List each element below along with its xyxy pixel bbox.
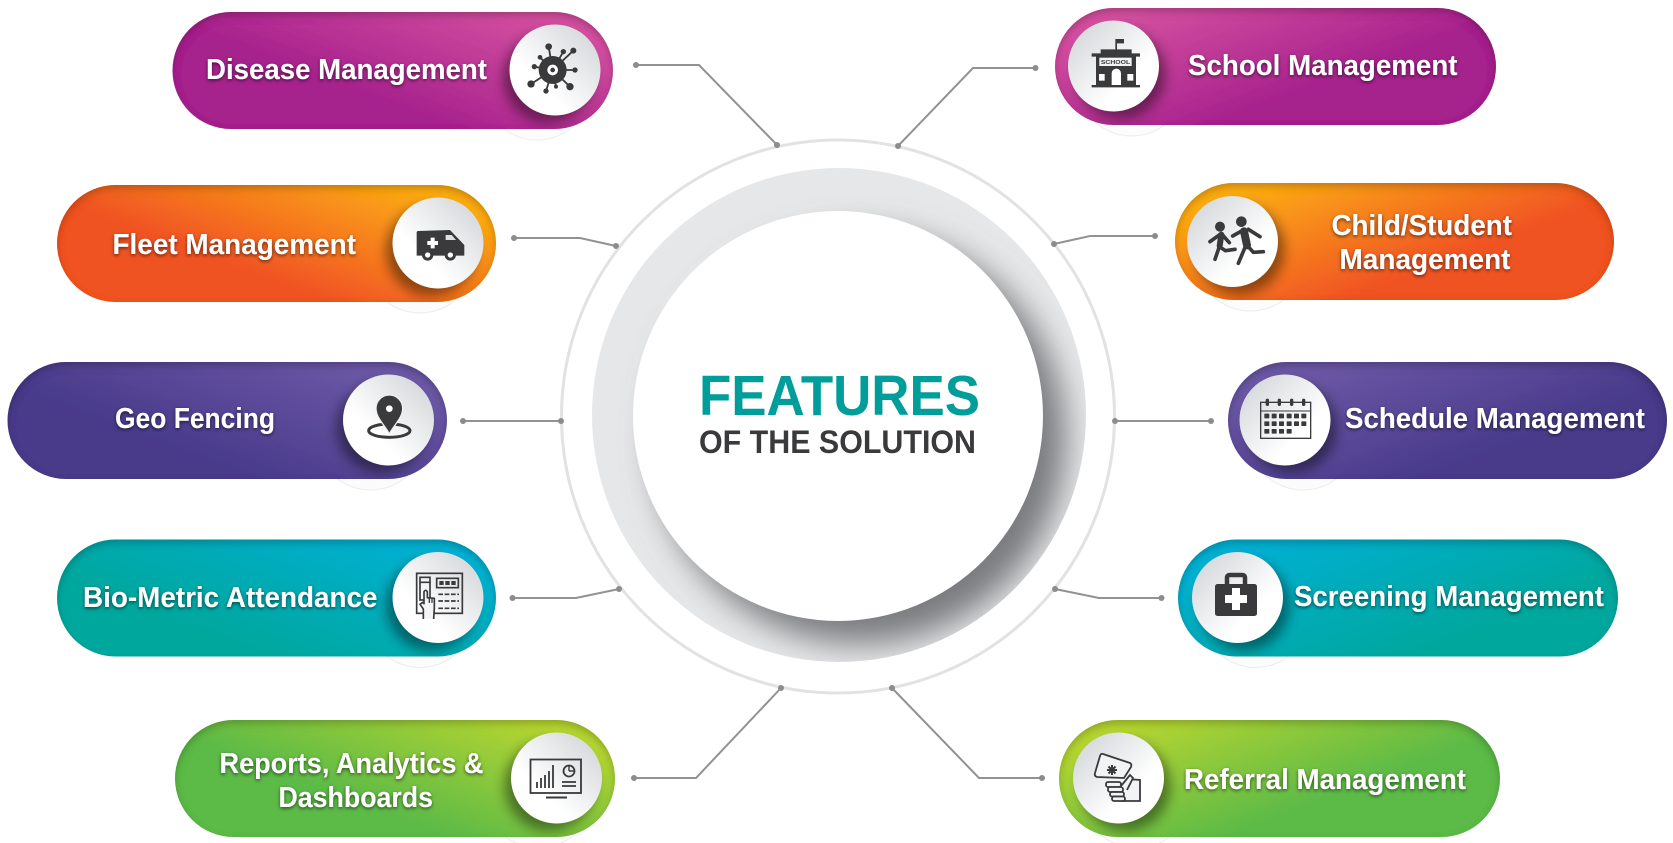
label: Bio-Metric Attendance [83, 582, 378, 614]
icon: biometric terminal [417, 573, 462, 619]
central circle [562, 140, 1114, 693]
label: Disease Management [206, 54, 487, 86]
icon: school building: SCHOOL [1101, 60, 1131, 66]
pill: Geo Fencing [8, 362, 447, 490]
pill: Reports, Analytics & Dashboards [175, 720, 615, 843]
pill: Child/Student Management: Management [1340, 244, 1511, 276]
label: Child/Student [1332, 210, 1512, 242]
pill: Schedule Management [1228, 362, 1667, 490]
icon: calendar [1261, 399, 1311, 438]
label: Fleet Management [112, 229, 356, 261]
icon: running children [1210, 216, 1263, 263]
icon: first aid kit [1215, 575, 1257, 616]
label: School Management [1188, 50, 1458, 82]
pill: Child/Student Management [1175, 183, 1614, 311]
connector: Bio-Metric Attendance [510, 586, 622, 601]
label: Geo Fencing [115, 403, 275, 435]
pill: Reports, Analytics & Dashboards: Dashboards [278, 782, 433, 814]
subtitle: OF THE SOLUTION: OF THE SOLUTION [699, 424, 976, 460]
connector: Reports [631, 685, 784, 781]
connector: Fleet Management [511, 235, 619, 249]
pill: Screening Management [1178, 540, 1618, 668]
pill: Fleet Management [57, 185, 496, 313]
connector: Child/Student Management [1051, 233, 1158, 247]
pill: Bio-Metric Attendance [57, 540, 496, 668]
icon: dashboard monitor [530, 760, 581, 798]
label: Referral Management [1184, 764, 1466, 796]
connector: Geo Fencing [460, 418, 564, 424]
connector: Schedule Management [1112, 418, 1214, 424]
connector: School Management [895, 65, 1038, 149]
pill: Referral Management [1059, 720, 1500, 843]
connector: Screening Management [1052, 586, 1164, 601]
pill: Disease Management [172, 12, 613, 140]
title: FEATURES: FEATURES [699, 364, 980, 428]
label: Screening Management [1294, 581, 1604, 613]
icon: virus [527, 43, 578, 94]
icon: map pin [369, 395, 410, 437]
connector: Referral Management [889, 685, 1045, 781]
icon: ambulance [417, 230, 464, 261]
label: Schedule Management [1345, 403, 1645, 435]
icon: school building [1092, 39, 1140, 87]
connector: Disease Management [633, 62, 780, 148]
icon: referral card in hand [1095, 754, 1140, 801]
pill: School Management [1055, 8, 1496, 136]
label: Reports, Analytics & [220, 748, 484, 780]
